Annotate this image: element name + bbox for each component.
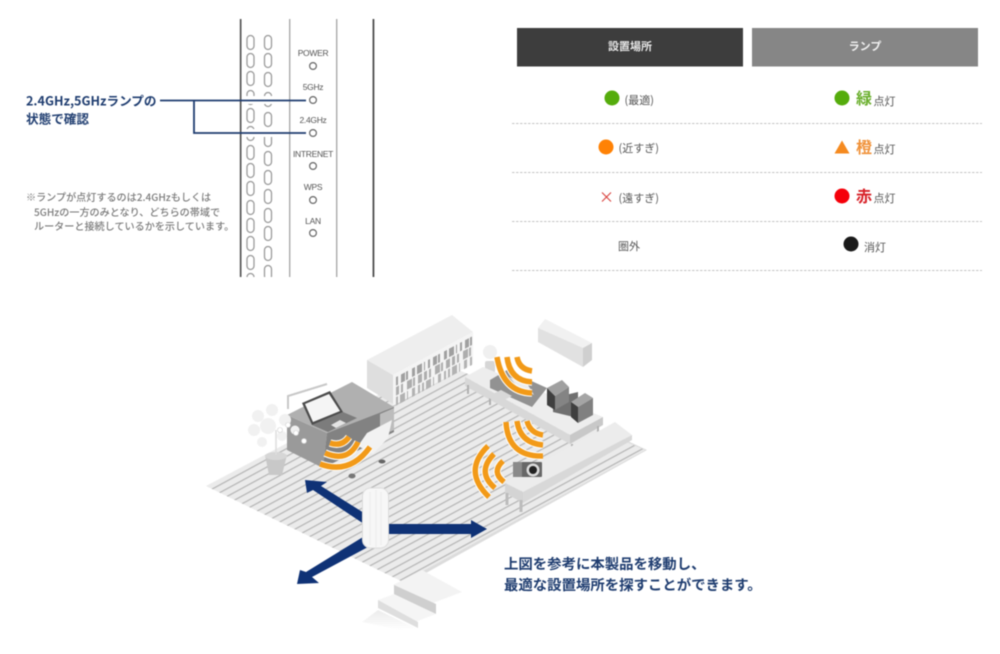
- desk: [287, 382, 394, 468]
- heading: lamp check: 2.4GHz,5GHzランプの: [26, 90, 156, 110]
- caption: 上図を参考に本製品を移動し、: [504, 553, 705, 574]
- small objects on floor: [348, 460, 388, 504]
- table header: location: [517, 28, 743, 66]
- floor: [206, 362, 645, 582]
- panel: router front diagram: [240, 19, 374, 288]
- router product: [362, 488, 388, 548]
- arrow: down-left: [297, 537, 368, 584]
- row: too close: 点灯: [874, 141, 896, 157]
- long bench: [505, 422, 632, 512]
- heading: lamp check: 状態で確認: [26, 108, 89, 128]
- small plant by TV board: [483, 345, 497, 373]
- caption: [504, 553, 762, 595]
- row: too close: (近すぎ): [618, 140, 659, 156]
- LED indicators and labels: WPS: [304, 182, 323, 192]
- note text: ※ランプが点灯するのは2.4GHzもしくは: [26, 189, 211, 204]
- lamp: [288, 384, 327, 409]
- LED indicators and labels: INTRENET: [293, 149, 333, 159]
- note text: [26, 189, 234, 233]
- row: out of range: [618, 236, 886, 255]
- floor shadow strip: [395, 436, 647, 583]
- potted plant: [248, 404, 306, 475]
- chair: [358, 420, 392, 454]
- row: optimal: [604, 85, 896, 109]
- row: out of range: 圏外: [618, 238, 640, 254]
- camera: [513, 462, 542, 477]
- table header: location: 設置場所: [608, 38, 652, 54]
- laptop: [302, 391, 357, 432]
- callout lines to 5GHz and 2.4GHz lamps: [160, 100, 306, 133]
- heading: lamp check: [26, 90, 156, 128]
- row: too far: 点灯: [874, 190, 896, 206]
- arrow: right: [386, 520, 487, 538]
- TV board: [465, 367, 603, 452]
- stairs: [362, 570, 462, 630]
- table header: lamp: [752, 28, 978, 66]
- air conditioner: [538, 319, 592, 367]
- row: too close: 橙: [856, 134, 872, 158]
- table header: lamp: ランプ: [849, 38, 881, 54]
- wifi signal: sofa: [497, 357, 532, 393]
- note text: 5GHzの一方のみとなり、どちらの帯域で: [34, 204, 220, 219]
- LED indicators and labels: 2.4GHz: [299, 115, 327, 125]
- LED indicators and labels: LAN: [305, 216, 321, 226]
- AV device on board: [487, 370, 547, 407]
- row dividers: [512, 124, 982, 270]
- panel: room illustration: [206, 315, 647, 630]
- LED indicators and labels: POWER: [298, 48, 328, 58]
- row: too far: (遠すぎ): [618, 190, 659, 206]
- row: too far: 赤: [856, 183, 872, 207]
- speakers: [547, 380, 593, 423]
- LED indicators and labels: 5GHz: [303, 82, 323, 92]
- row: too close: [598, 134, 896, 158]
- row: too far: [602, 183, 896, 207]
- row: optimal: (最適): [624, 92, 654, 108]
- bookshelf: [367, 315, 473, 406]
- note text: ルーターと接続しているかを示しています。: [34, 218, 234, 233]
- wifi signal: camera left: [475, 446, 504, 497]
- row: out of range: 消灯: [864, 239, 886, 255]
- caption: 最適な設置場所を探すことができます。: [504, 574, 762, 595]
- row: optimal: 点灯: [874, 93, 896, 109]
- device body outlines: [240, 19, 374, 288]
- arrow: up-left: [305, 480, 364, 524]
- panel: status table: [512, 28, 982, 270]
- row: optimal: 緑: [856, 85, 872, 109]
- wifi signal: camera top: [506, 421, 543, 456]
- LED indicators and labels: [293, 48, 333, 236]
- wifi signal: desk: [320, 437, 370, 467]
